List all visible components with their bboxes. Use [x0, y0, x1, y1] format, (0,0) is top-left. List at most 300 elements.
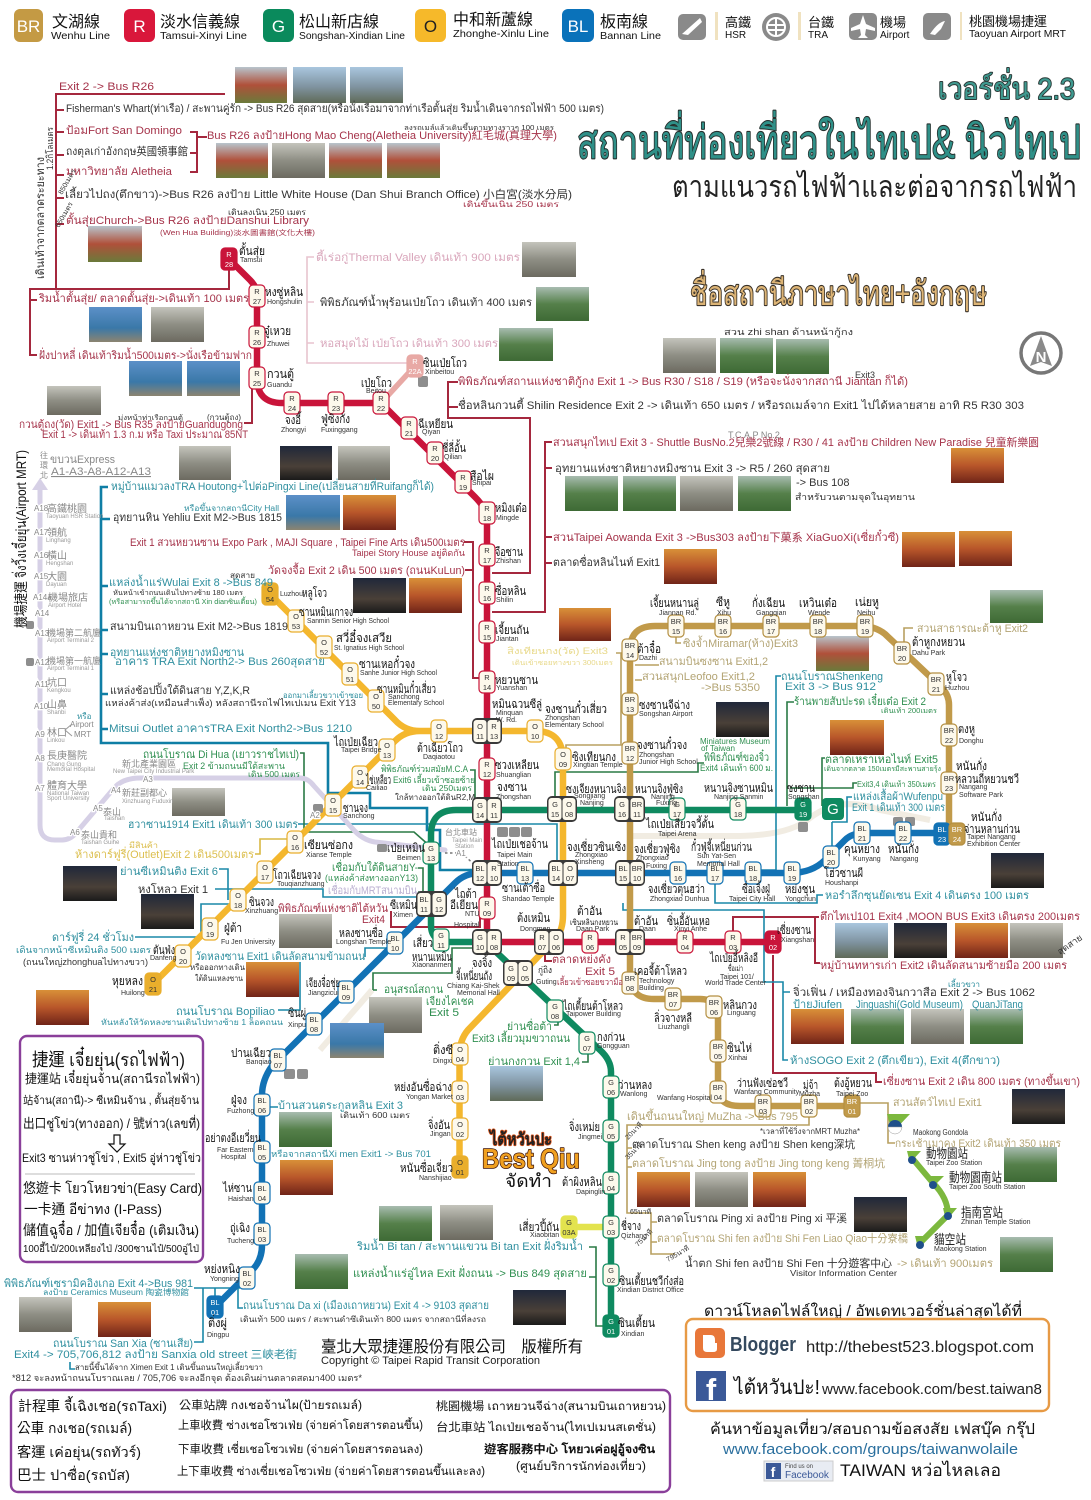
station names: blue line west: [204, 841, 555, 1339]
station names: orange line: Sanhe Junior High School: [360, 670, 437, 677]
station names: orange line: Xingtian Temple: [573, 762, 623, 769]
station names: blue line west: Hospital: [454, 922, 480, 929]
stations: blue line: BL: [787, 864, 797, 873]
photo: Fisherman's Wharf set: [235, 67, 403, 103]
station names: north red line: สือไผ: [470, 469, 494, 483]
leader lines: green: [300, 702, 857, 1326]
stations: orange line: 13: [383, 751, 391, 760]
stations: red line: 26: [253, 338, 261, 347]
callouts: west teal trunk: Mitsui Outlet อาคารTRA Exit North2->Bus 1210: [109, 723, 352, 735]
callouts: east brown line: Exit 3 -> Bus 912: [785, 681, 876, 693]
stations: green line: 04: [607, 1184, 615, 1193]
station names: blue line west: เจียงจื่อชุ่ย: [306, 974, 340, 991]
photo: Beitou hot spring museum: [536, 287, 589, 321]
station names: north red line: Hongshulin: [267, 299, 302, 306]
stations: green line: 01: [607, 1327, 615, 1336]
stations: brown line: 20: [898, 654, 906, 663]
station names: north red line: ซวงเหลียน: [495, 758, 539, 772]
station names: central east: Nangang: [890, 856, 919, 863]
stations: blue line: 07: [274, 1061, 282, 1070]
airport MRT station list: Station: [455, 844, 474, 850]
maokong gondola stations: 指南宮站: [961, 1205, 1003, 1220]
legend: Wenhu line: BR: [17, 17, 40, 36]
stations: blue line: 06: [258, 1106, 266, 1115]
station names: orange line: ต้งเหมิน: [517, 911, 550, 925]
callouts: west teal trunk: แหล่งช้อปปิ้งใต้ดินสาย Y,Z,K,R: [110, 682, 250, 697]
stations: blue line: 14: [552, 874, 560, 883]
station names: brown line north: Songshan Airport: [639, 711, 693, 718]
stations: green line: 13: [427, 854, 435, 863]
maokong gondola stations: 貓空站: [934, 1232, 966, 1247]
panel: transport vocabulary: 客運 เค่อยุ่น(รถทัวร์): [17, 1444, 141, 1461]
station names: blue line west: ถู่เฉิง: [230, 1221, 250, 1236]
copyright: [321, 1338, 583, 1367]
callouts: west teal trunk: Exit 5: [585, 966, 615, 978]
callouts: west teal trunk: [65, 478, 623, 987]
callouts: west teal trunk: Exit 1 สวนหยวนซาน Expo Park , MAJI Square , Taipei Fine Arts เดิน500เมตร: [130, 537, 465, 549]
station names: brown line north: Taipei Nangang: [967, 834, 1016, 841]
airport MRT station list: 機場第一航廈: [47, 655, 101, 666]
stations: red line: R: [491, 933, 497, 942]
stations: orange line: 10: [531, 732, 539, 741]
stations: orange line: 19: [206, 930, 214, 939]
stations: blue line: BL: [341, 983, 351, 992]
arrow: down: [109, 1135, 125, 1152]
callouts: Tamsui area: กวนตู้ถง(วัด) Exit1 -> Bus R35 ลงป้ายGuandugong: [19, 419, 243, 431]
station names: north red line: Qilian: [444, 454, 462, 461]
station names: south: เคอจี้ต้าโหลว: [634, 962, 687, 978]
station names: orange line: Fu Jen University: [221, 939, 276, 946]
photo: Dahu park: [990, 590, 1043, 623]
stations: orange line: 52: [320, 648, 328, 657]
station names: orange line: Taipei Bridge: [341, 747, 382, 754]
stations: brown line: 06: [710, 1008, 718, 1017]
icon: HSR: 高鐵: [725, 15, 751, 30]
station names: central east: คุนหยาง: [844, 842, 880, 857]
station names: central east: Daan: [639, 926, 656, 933]
stations: blue line: 16: [674, 874, 682, 883]
airport MRT station list: A3: [143, 775, 153, 784]
photo: Taipei 101 set: [835, 923, 1063, 958]
callouts: west teal trunk: สุดสาย: [230, 571, 255, 580]
photo: Beitou library: [499, 328, 553, 361]
icon: G line marker: G: [827, 801, 839, 818]
icon: TRA: TRA: [808, 30, 828, 41]
station names: central east: Xiangshan: [781, 937, 814, 944]
airport MRT station list: Dayuan: [46, 582, 67, 588]
station names: central east: Taipei City Hall: [729, 896, 776, 903]
metro line: airport MRT: [32, 478, 480, 870]
callouts: New Taipei south-west: ถนนโบราณ Da xi (เมืองเถาหยวน) Exit 4 -> 9103 สุดสาย: [243, 1298, 489, 1312]
station names: south: Jingmei: [578, 1134, 603, 1141]
stations: green line: 05: [607, 1132, 615, 1141]
leader lines: red: [30, 94, 882, 1082]
photo: Jiufen set: [791, 1009, 1023, 1044]
station names: orange line: Dingxi: [433, 1058, 453, 1065]
leader lines: tan and gold: [255, 628, 913, 1254]
stations: green line: 18: [734, 810, 742, 819]
stations: blue line: 15: [619, 874, 627, 883]
photo: Guandu temple: [47, 386, 101, 415]
stations: red line: 07: [538, 943, 546, 952]
airport MRT station list: 林口: [47, 726, 67, 739]
stations: blue line: BL: [551, 864, 561, 873]
station names: south: Xinhai: [728, 1055, 748, 1062]
station names: orange line: ตันฟ่ง: [153, 943, 175, 957]
station names: orange line: Cailiao: [366, 785, 388, 792]
icon: maokong station: [915, 1236, 929, 1249]
callouts: Ximen and Wanhua: ย่านซื่อต้า: [507, 1018, 552, 1033]
stations: blue line: 21: [858, 834, 866, 843]
stations: brown line: 16: [719, 627, 727, 636]
station names: orange line: Luzhou: [280, 591, 303, 598]
stations: green line: 12: [435, 905, 443, 914]
stations: brown line: 21: [932, 685, 940, 694]
callouts: Beitou and Shilin: -> Bus 108: [796, 477, 850, 489]
stations: brown line: 18: [814, 627, 822, 636]
callouts: west teal trunk: หันหน้าเข้าถนนเดินไปทางซ้าย 180 เมตร: [113, 588, 243, 597]
stations: green line: 11: [437, 941, 445, 950]
station names: central east: ซงซาน: [787, 781, 815, 795]
stations: brown line: 17: [767, 627, 775, 636]
stations: blue line: BL: [210, 1298, 220, 1307]
photo: Longshan Temple: [246, 962, 299, 997]
photo: Pingxi lantern: [854, 1197, 907, 1232]
stations: blue line: 09: [342, 993, 350, 1002]
stations: red line: 18: [483, 514, 491, 523]
station names: north red line: Tamsui: [240, 257, 263, 264]
stations: red line: 22A: [408, 367, 422, 376]
station names: north red line: Taipei Main: [497, 852, 533, 859]
airport MRT station list: 台北車站: [445, 827, 477, 837]
callouts: Muzha bus routes: 795นาที: [665, 1244, 691, 1264]
station names: south: เสี่ยวปี้ถัน: [519, 1218, 559, 1234]
station names: orange line: ฝู่ต้า: [224, 921, 242, 936]
stations: orange line: 04: [456, 1055, 464, 1064]
stations: orange line: 05: [521, 974, 529, 983]
stations: blue line: BL: [257, 1184, 267, 1193]
stations: brown line: 24: [953, 835, 961, 844]
icon: Facebook: f: [706, 1372, 717, 1407]
stations: orange line: O: [560, 750, 566, 759]
stations: brown line: BR: [944, 726, 955, 735]
arrow: towards airport: [32, 478, 48, 490]
photo: Baoan temple set: [353, 578, 462, 613]
stations: orange line: O: [180, 947, 186, 956]
legend: other transport: [678, 12, 1066, 41]
stations: blue line: 13: [521, 874, 529, 883]
airport MRT station list: 新莊副都心: [122, 787, 167, 798]
callouts: Tamsui area: ถงตุลเก่าอังกฤษ英國領事館: [66, 144, 188, 158]
callouts: Beitou and Shilin: ตี้เร่อกู่Thermal Valley เดินเท้า 900 เมตร: [316, 249, 520, 264]
station names: north red line: Fuxinggang: [321, 427, 358, 434]
branch: Xinbeitou: [381, 366, 415, 403]
station names: brown line north: Neihu: [857, 610, 875, 617]
airport MRT station list: Linghang: [46, 538, 71, 544]
maokong gondola stations: 動物園南站: [949, 1170, 1002, 1185]
airport MRT station list: A13: [35, 629, 50, 638]
callouts: New Taipei south-west: ถนนโบราณ San Xia (ซานเสีย): [53, 1336, 193, 1350]
station names: blue line west: Beimen: [397, 855, 421, 862]
station names: north red line: จงอี้: [285, 411, 302, 427]
callouts: east brown line: Miniatures Museum: [700, 737, 770, 746]
callouts: Ximen and Wanhua: หงโหลว Exit 1: [138, 882, 208, 896]
station names: orange line: จงซานกั๋วเสี่ยว: [545, 699, 607, 716]
station names: north red line: Mingde: [496, 515, 519, 522]
station names: orange line: ซานหมินเกาจง: [299, 605, 353, 619]
station names: brown line north: Junior High School: [639, 759, 698, 766]
icon: find us on Facebook: f: [771, 1464, 776, 1480]
stations: green line: G: [477, 933, 483, 942]
station names: south: ไถเตี้ยนต้าโหลว: [562, 997, 623, 1013]
stations: orange line: 17: [261, 873, 269, 882]
icon: find us on Facebook: Facebook: [785, 1470, 830, 1481]
stations: orange line: 14: [356, 778, 364, 787]
stations: orange line: O: [207, 920, 213, 929]
panel: transport vocabulary: 公車 กงเชอ(รถเมล์): [17, 1420, 132, 1436]
callouts: Tamsui area: ตั้นสุ่ยChurch->Bus R26 ลงป้ายDanshui Library: [66, 212, 310, 227]
stations: orange line: O: [566, 800, 572, 809]
stations: orange line: 09: [559, 760, 567, 769]
callouts: Muzha bus routes: ตลาดโบราณ Ping xi ลงป้าย Ping xi 平溪: [657, 1211, 847, 1225]
copyright: 臺北大眾捷運股份有限公司 版權所有: [321, 1338, 583, 1356]
callouts: Ximen and Wanhua: Exit3 เลี้ยวมุมขวาถนน: [472, 1030, 570, 1045]
callouts: west teal trunk: พิพิธภัณฑ์ร่วมสมัยM.C.A: [381, 763, 468, 774]
station names: north red line: Jiantan: [496, 636, 519, 643]
callouts: Muzha bus routes: 65นาที: [630, 1208, 652, 1216]
stations: red line: 05: [619, 943, 627, 952]
stations: green line: 07: [583, 1044, 591, 1053]
stations: red line: 10: [490, 874, 498, 883]
icon: TRA: [762, 12, 834, 41]
airport MRT station list: A7: [35, 784, 45, 793]
stations: green line: [423, 798, 844, 1337]
station names: orange line: Songjiang: [574, 793, 605, 800]
station names: north red line: ซินเป่ยโถว: [423, 356, 467, 370]
callouts: east brown line: Exit3,4 เดินเท้า 350เมตร: [857, 780, 937, 789]
airport MRT station list: 高鐵桃園: [47, 502, 87, 515]
callouts: west teal trunk: ออกมาเลี้ยวขวาเข้าซอย: [283, 689, 363, 700]
callouts: Muzha bus routes: ตลาดโบราณ Jing tong ลงป้าย Jing tong keng 菁桐坑: [632, 1156, 885, 1170]
callouts: New Taipei south-west: แหล่งน้ำแร่อู่ไหล Exit ฝั่งถนน -> Bus 849 สุดสาย: [353, 1265, 587, 1280]
callouts: east brown line: ตึกไทเป101 Exit4 ,MOON BUS Exit3 เดินตรง 200เมตร: [820, 910, 1080, 923]
callouts: Tamsui area: เดินลงเนิน 250 เมตร: [228, 208, 307, 217]
stations: red line: 17: [483, 556, 491, 565]
stations: red line: 22: [377, 404, 385, 413]
stations: red line: R: [484, 584, 490, 593]
stations: red line: 12: [483, 770, 491, 779]
airport MRT station list: A17: [34, 528, 49, 537]
stations: orange line: 01: [456, 1168, 464, 1177]
callouts: Beitou and Shilin: พิพิธภัณฑ์สถานแห่งชาติกู้กง Exit 1 -> Bus R30 / S18 / S19 (หรือจะนั่งจากสถานี Jiantan ก็ได้): [458, 373, 908, 388]
station names: orange line: ซานจง: [343, 801, 368, 815]
station names: north red line: เป่ยโถว: [361, 376, 392, 390]
text block: Facebook group: www.facebook.com/groups/taiwanwolaile: [722, 1441, 1018, 1458]
station names: central east: จงเซี่ยวฟู่ซิง: [634, 840, 680, 857]
stations: blue line: 05: [258, 1153, 266, 1162]
stations: blue line: 08: [310, 1025, 318, 1034]
station names: central east: Sun Yat-Sen: [697, 853, 736, 860]
callouts: east brown line: Jinguashi(Gold Museum): [856, 999, 963, 1011]
airport MRT station list: Taipei Main: [452, 838, 482, 844]
airport MRT station list: Kengkou: [47, 688, 71, 694]
airport MRT station list: 新北產業園區: [122, 758, 176, 769]
stations: brown line: BR: [713, 1042, 724, 1051]
legend: Bannan line: Bannan Line: [600, 30, 661, 42]
callouts: west teal trunk: อุทยานหิน Yehliu Exit M2->Bus 1815: [113, 512, 282, 524]
station names: south: กงก่วน: [597, 1030, 625, 1044]
stations: brown line: BR: [632, 800, 643, 809]
photo: Houtong and Pingxi set: [179, 446, 390, 480]
callouts: Muzha bus routes: น้ำตก Shi fen ลงป้าย Shi Fen 十分遊客中心: [685, 1255, 892, 1270]
icon: zhinan temple station: [943, 1208, 957, 1221]
icon: TRA: 台鐵: [808, 15, 834, 30]
icon: Facebook: [696, 1371, 726, 1407]
callouts: Muzha bus routes: -> เดินเท้า 900เมตร: [897, 1258, 993, 1270]
station names: orange line: Elementary School: [388, 700, 444, 707]
station names: south: ซินเตี้ยน: [618, 1314, 655, 1330]
station names: central east: ซื่อเจิ้งฝู่: [742, 880, 770, 897]
panel: MRT vocabulary: [20, 1036, 203, 1262]
photo: Fort San Domingo set: [216, 143, 440, 178]
station names: south: Technology: [639, 978, 675, 985]
stations: green line: 06: [607, 1088, 615, 1097]
maokong gondola stations: Taipei Zoo South Station: [949, 1184, 1025, 1191]
airport MRT station list: 長庚醫院: [47, 749, 87, 762]
airport MRT station list: A2: [310, 811, 320, 820]
station names: south: Taipei Zoo: [836, 1091, 868, 1098]
station names: blue line west: อย่าตงอีเยวี่ยน: [205, 1129, 261, 1145]
photo: Zhishan and palace museum set: [663, 338, 829, 374]
airport MRT station list: Sport University: [47, 796, 89, 802]
station names: north red line: Zhishan: [496, 558, 521, 565]
panel: download links: Blogger: [730, 1334, 796, 1356]
station names: south: Taipower Building: [566, 1011, 621, 1018]
station names: north red line: ซื่อหลิน: [495, 582, 526, 598]
station names: central east: Taipei Arena: [658, 831, 697, 838]
airport MRT station list: Airport Terminal 2: [47, 638, 95, 644]
stations: red line: R: [484, 760, 490, 769]
stations: blue line: BL: [826, 848, 836, 857]
legend: Bannan line: BL: [568, 17, 588, 36]
legend: Wenhu line: [14, 9, 110, 42]
callouts: west teal trunk: หรือขึ้นจากสถานีCity Hall: [184, 502, 279, 513]
station names: central east: Xinyi Anhe: [674, 926, 707, 933]
station names: blue line west: ปานเฉียว: [231, 1046, 271, 1060]
station names: orange line: ซานเหอกั๋วจง: [359, 654, 415, 671]
station names: north red line: จือซาน: [495, 545, 523, 559]
station names: orange line: Dongmen: [520, 926, 550, 933]
callouts: east brown line: สวนสัตว์ไทเป Exit1: [893, 1096, 982, 1109]
stations: orange line: 18: [234, 901, 242, 910]
station names: brown line north: Huzhou: [945, 685, 969, 692]
station names: orange line: Danfeng: [150, 955, 177, 962]
callouts: west teal trunk: สนามบินเถาหยวน Exit M2->Bus 1819: [110, 621, 288, 633]
station names: brown line north: Nangang: [959, 784, 988, 791]
station names: brown line north: หนันกั่ง: [971, 808, 1002, 824]
stations: orange line: 03: [456, 1093, 464, 1102]
callouts: west teal trunk: ตลาดหย่งคัง: [552, 954, 611, 966]
stations: orange line: O: [457, 1120, 463, 1129]
maokong gondola stations: Maokong Station: [934, 1246, 987, 1253]
callouts: Tamsui area: 850เมตร: [58, 168, 78, 196]
stations: red line: R: [484, 899, 490, 908]
panel: transport vocabulary: (ศูนย์บริการนักท่องเที่ยว): [516, 1458, 646, 1473]
metro line: Wenhu brown: [630, 626, 956, 1106]
logo: Best Qiu: จัดทำ: [505, 1171, 552, 1191]
stations: blue line: 17: [711, 874, 719, 883]
station names: orange line: ซิงเทียนกง: [572, 750, 616, 764]
callouts: west teal trunk: Taipei Story House อยู่ติดกัน: [352, 548, 465, 559]
stations: brown line: 01: [848, 1107, 856, 1116]
logo: Best Qiu: ไต้หวันปะ: [488, 1129, 552, 1149]
panel: transport vocabulary: 台北車站 ไถเป่ยเชอจ้าน(ไทเปเมนสเตชั่น): [436, 1419, 656, 1434]
stations: red line: R: [226, 250, 232, 259]
airport MRT station list: A15: [34, 572, 49, 581]
panel: transport vocabulary: 上下車收費 ซ่างเซี่ยเชอโซวเฟ่ย (จ่ายค่าโดยสารตอนขึ้นและลง): [177, 1463, 485, 1478]
station names: central east: ไถเป่ยอี้หลิงอี: [709, 949, 758, 965]
station names: orange line: Yongan Market: [406, 1094, 453, 1101]
station names: orange line: ซานหมินกั๋วเสี่ยว: [377, 679, 436, 696]
station names: blue line west: Tucheng: [227, 1238, 254, 1245]
callouts: west teal trunk: แหล่งน้ำแร่Wulai Exit 8 ->Bus 849: [109, 574, 273, 589]
airport MRT station list: [11, 450, 482, 858]
heading: download: ดาวน์โหลดไฟล์ใหญ่ / อัพเดทเวอร์ชั่นล่าสุดได้ที่: [704, 1300, 1022, 1321]
photo: Wulai: [513, 1290, 566, 1325]
callouts: east brown line: ตลาดเหราเหอไนท์ Exit5: [825, 753, 938, 766]
station names: orange line: Sanchong: [343, 813, 375, 820]
stations: brown line: BR: [625, 695, 636, 704]
station names: orange line: จงเซี่ยวซินเซิง: [567, 838, 626, 854]
callouts: Ximen and Wanhua: หันหลังให้วัดหลงซานเดินไปทางซ้าย 1 ล็อคถนน: [101, 1017, 284, 1027]
stations: green line: G: [508, 964, 514, 973]
station names: blue line west: Xiaonanmen: [412, 962, 451, 969]
station names: central east: ต้าอัน: [634, 914, 658, 928]
stations: brown line: BR: [713, 1083, 724, 1092]
stations: orange line: O: [457, 1083, 463, 1092]
stations: orange line: 21: [149, 985, 157, 994]
callouts: east brown line: ป้ายJiufen: [793, 999, 842, 1011]
station names: central east: Songshan: [788, 794, 820, 801]
station names: north red line: ฟู่ซิงกั่ง: [321, 410, 350, 427]
station names: central east: หนันกั่ง: [888, 840, 919, 856]
airport MRT station list: 機場第二航廈: [47, 627, 101, 638]
stations: red line: 24: [288, 404, 296, 413]
stations: red line: R: [539, 933, 545, 942]
station names: orange line: ไช่เหลียว: [365, 773, 391, 787]
panel: transport vocabulary: 下車收費 เซี่ยเชอโซวเฟ่ย (จ่ายค่าโดยสารตอนลง): [178, 1441, 423, 1456]
station names: orange line: กู่ถิง: [538, 965, 552, 976]
stations: green line: G: [566, 1218, 572, 1227]
rotated heading: airport MRT: 機場捷運 จิ่งวิ้งเจี๋ยยุ่น(Airport MRT): [11, 450, 30, 628]
callouts: Tamsui area: (กวนตู้ถง): [207, 413, 241, 423]
station names: blue line west: Yongning: [210, 1276, 239, 1283]
stations: orange line: O: [292, 833, 298, 842]
station names: blue line west: Jiangzicui: [308, 990, 339, 997]
airport MRT station list: Taishan Guihe: [81, 840, 120, 846]
legend: Bannan line: [562, 9, 661, 42]
photo: Bopiliao alt: [280, 1160, 333, 1195]
callouts: Tamsui area: เดินขึ้นเนิน 250 เมตร: [463, 198, 560, 209]
stations: green line: G: [608, 1266, 614, 1275]
station names: south: Building: [639, 985, 664, 992]
legend: Wenhu line: Wenhu Line: [51, 30, 110, 42]
station names: south: หลินกวง: [723, 998, 757, 1012]
stations: brown line: 15: [672, 627, 680, 636]
airport MRT station list: 往: [40, 450, 48, 460]
station names: central east: [570, 781, 919, 987]
stations: green line: G: [608, 1122, 614, 1131]
